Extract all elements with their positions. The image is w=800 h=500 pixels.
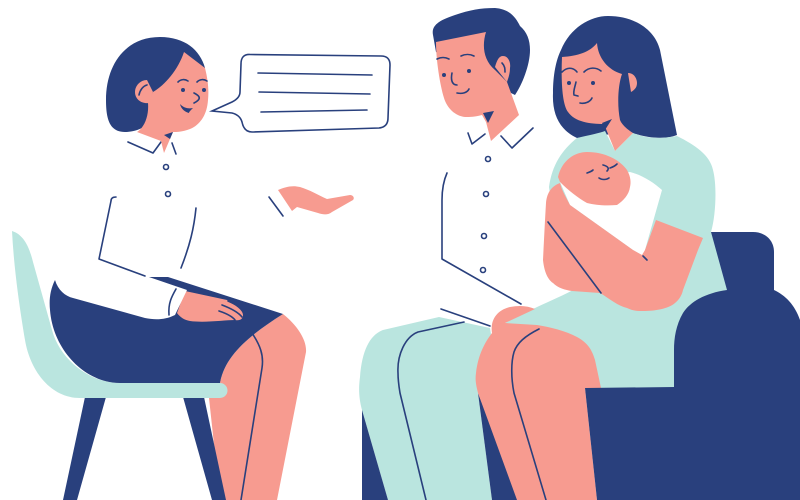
chair legs: [63, 397, 226, 500]
baby head: [558, 152, 631, 205]
baby face: [587, 164, 617, 180]
counsellor leg: [209, 314, 306, 500]
counsellor ear: [135, 80, 153, 103]
father facial features: [437, 54, 474, 93]
counsellor hand on lap: [177, 291, 243, 322]
mother hair: [553, 16, 677, 138]
sofa arm and base: [585, 290, 800, 500]
father face and neck: [436, 32, 519, 141]
counsellor blouse arm: [55, 270, 187, 319]
mother: [476, 16, 727, 500]
mother arm: [543, 183, 703, 311]
father ear: [495, 56, 510, 82]
speech bubble: [212, 54, 390, 132]
skirt: [50, 277, 283, 383]
mother ear: [628, 73, 637, 92]
shadow under father leg: [362, 393, 520, 500]
baby blanket: [560, 172, 662, 258]
sofa back: [705, 232, 774, 300]
father shirt lines and buttons: [441, 128, 533, 326]
counsellor facial features: [178, 80, 207, 113]
mother neck shadow: [602, 119, 612, 130]
neck shadow: [164, 132, 173, 139]
mother facial features: [562, 68, 601, 103]
blouse lines and buttons: [99, 142, 196, 276]
mother face and neck: [562, 43, 633, 151]
counsellor face and neck: [137, 52, 208, 153]
father leg: [359, 317, 492, 500]
counsellor hair: [106, 37, 205, 132]
chair seat: [12, 231, 228, 398]
mother front leg: [476, 323, 601, 500]
father hair: [433, 8, 530, 95]
mother dress: [505, 131, 727, 388]
father: [359, 8, 533, 500]
outstretched hand: [269, 186, 354, 216]
mother knee behind: [492, 306, 535, 333]
seated counsellor with chair: [12, 37, 354, 500]
father neck shadow: [483, 111, 494, 123]
